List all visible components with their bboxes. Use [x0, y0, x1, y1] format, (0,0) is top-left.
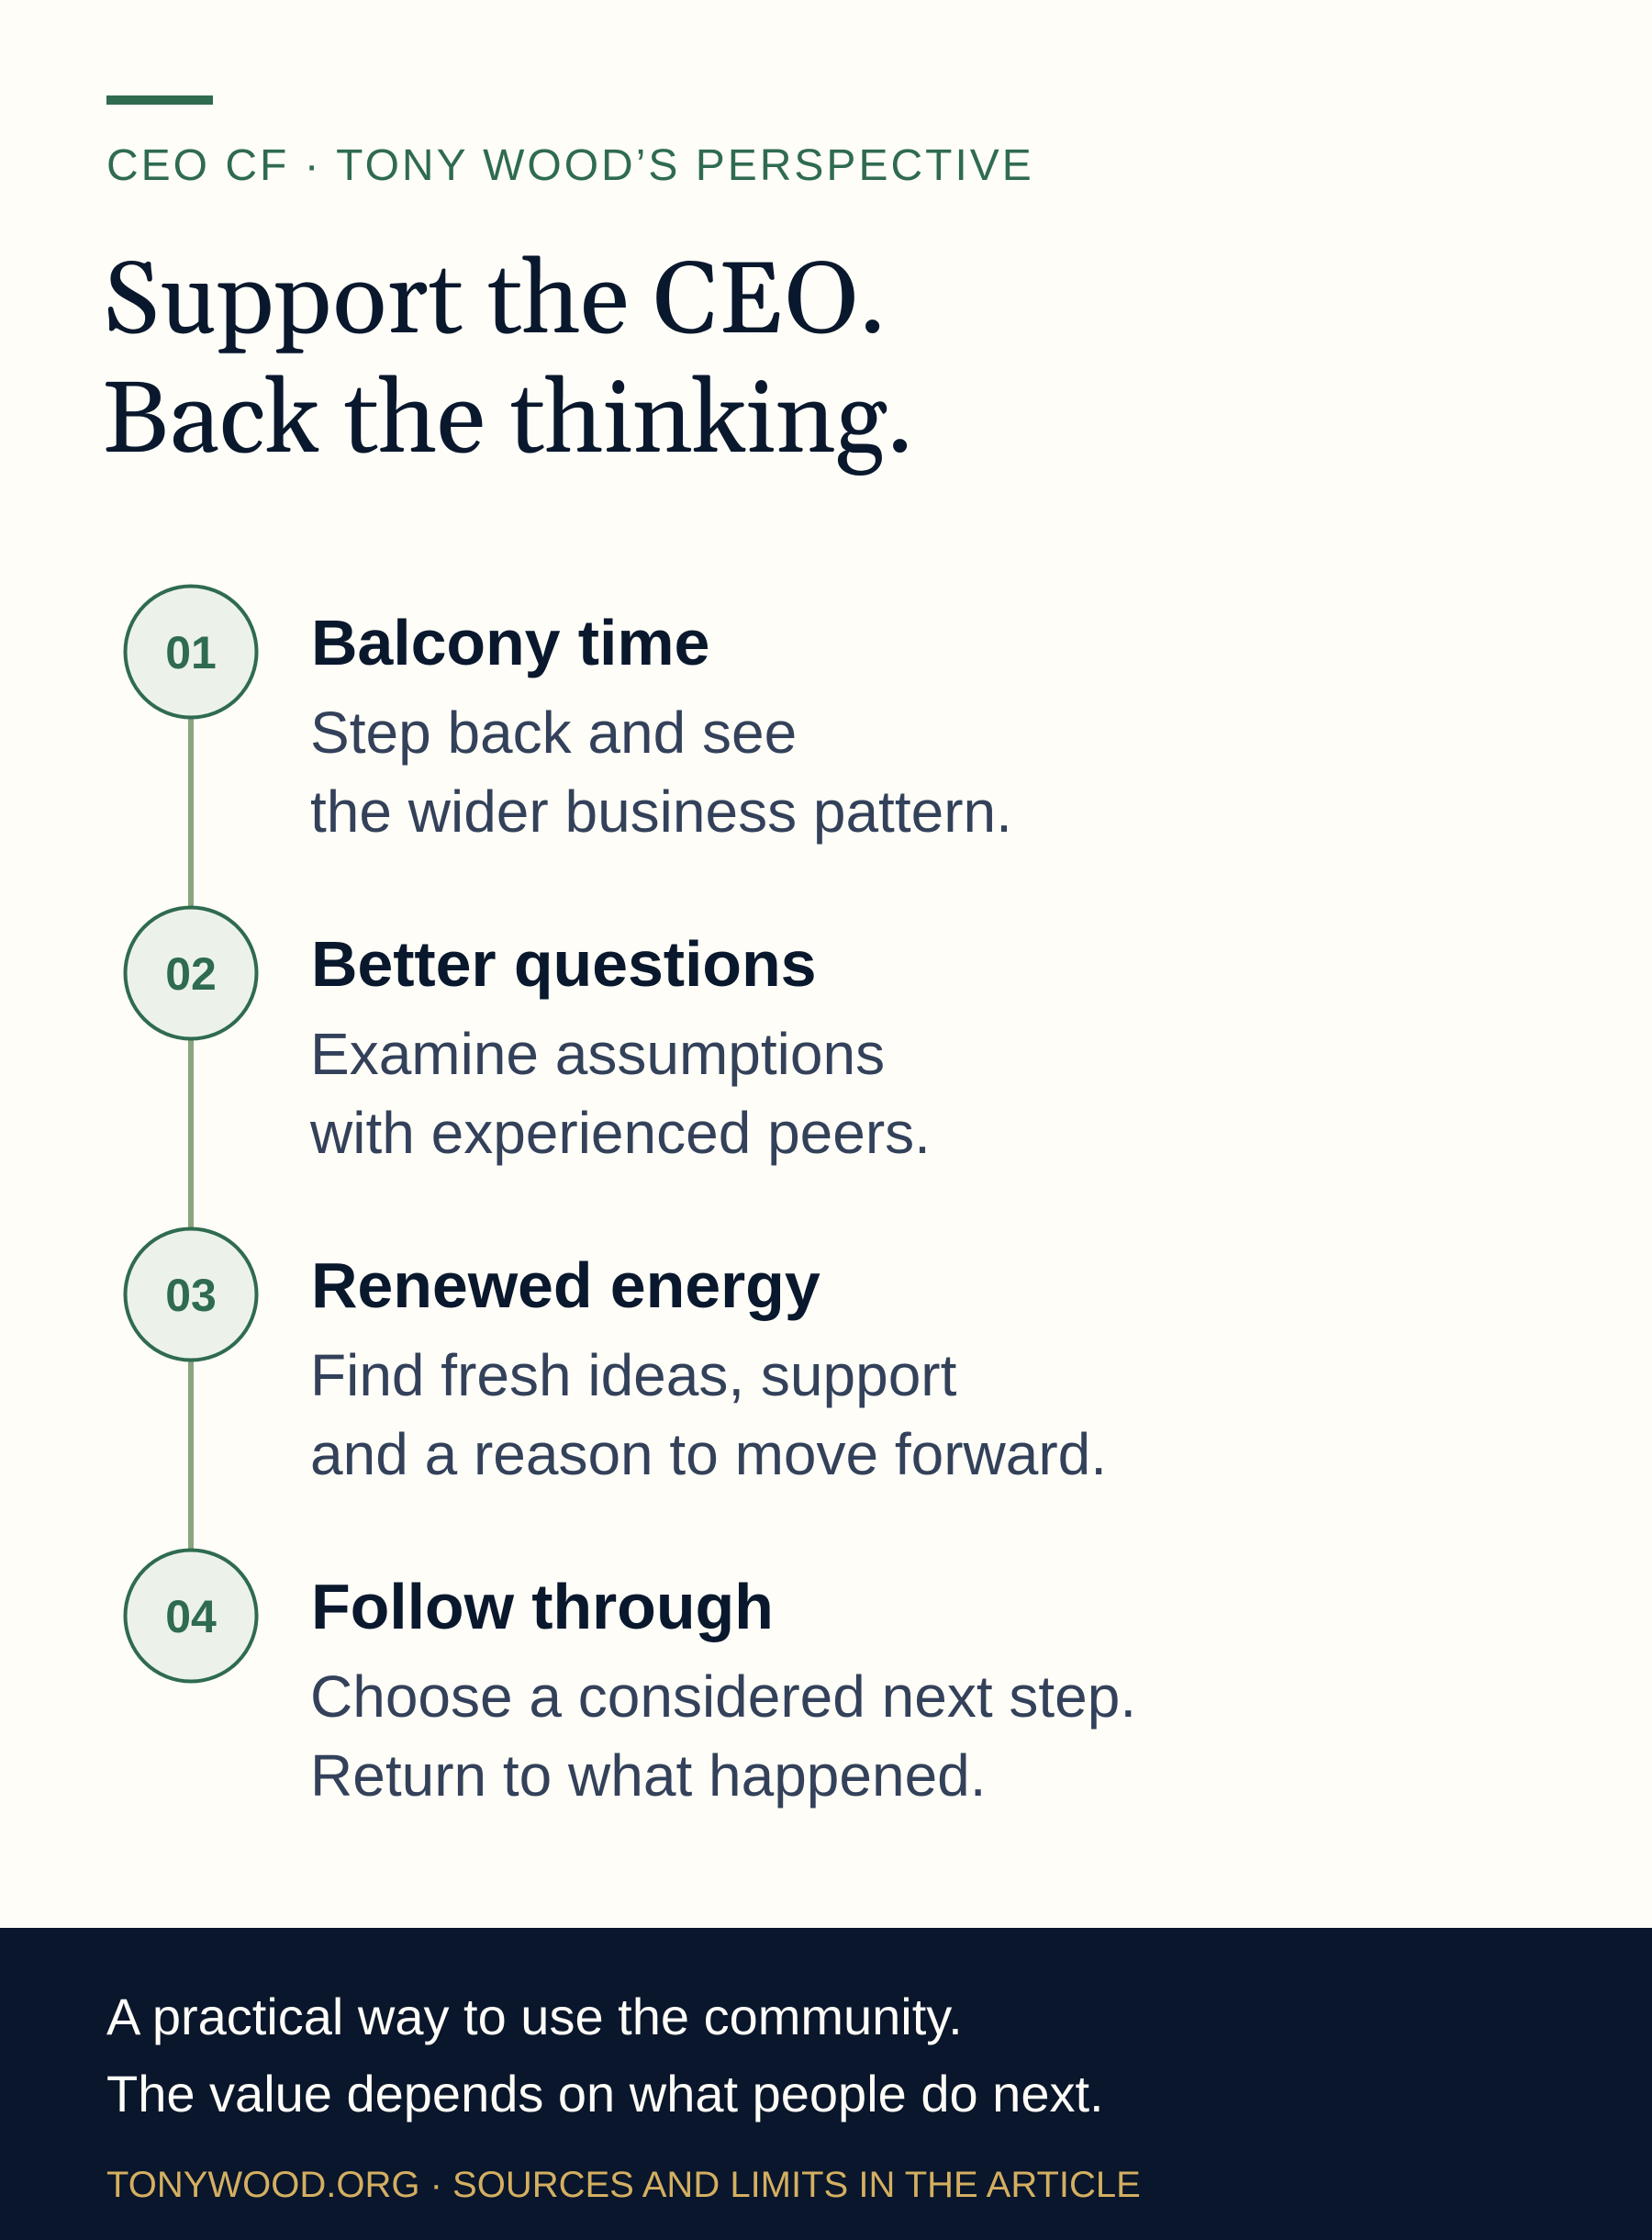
footer statement — [106, 1988, 1104, 2122]
step 3 heading: Renewed energy — [311, 1249, 820, 1321]
footer statement: The value depends on what people do next. — [106, 2065, 1104, 2122]
step 3 text: and a reason to move forward. — [310, 1421, 1107, 1487]
step 4 badge: 04 — [165, 1591, 217, 1642]
eyebrow: CEO CF · TONY WOOD’S PERSPECTIVE — [106, 141, 1034, 190]
step 1 badge: 01 — [165, 627, 217, 678]
step 1 text: the wider business pattern. — [310, 778, 1012, 845]
step 3 badge: 03 — [165, 1270, 217, 1321]
step 4: Follow through — [125, 1550, 1136, 1809]
footer band — [0, 1928, 1652, 2240]
step 2: Better questions — [125, 907, 931, 1166]
title: Support the CEO. — [103, 239, 886, 367]
step 2 badge — [125, 907, 257, 1039]
step 2 badge: 02 — [165, 948, 217, 1000]
step 4 badge — [125, 1550, 257, 1682]
step 4 heading: Follow through — [311, 1571, 774, 1642]
step 4 text — [310, 1663, 1136, 1809]
connector line 2 — [188, 1037, 194, 1230]
step 2 text: with experienced peers. — [309, 1100, 931, 1166]
footer source line: TONYWOOD.ORG · SOURCES AND LIMITS IN THE ARTICLE — [106, 2165, 1141, 2205]
step 3 text: Find fresh ideas, support — [310, 1342, 957, 1408]
step 2 text — [309, 1021, 931, 1166]
step 1 badge — [125, 586, 257, 718]
step 1: Balcony time — [125, 586, 1012, 845]
step 1 text: Step back and see — [310, 700, 797, 766]
title — [103, 239, 913, 487]
step 4 text: Return to what happened. — [310, 1742, 987, 1809]
step 3 badge — [125, 1228, 257, 1361]
step 1 text — [310, 700, 1012, 845]
footer statement: A practical way to use the community. — [106, 1988, 963, 2045]
connector line 3 — [188, 1359, 194, 1551]
accent bar — [106, 95, 213, 105]
step 2 text: Examine assumptions — [310, 1021, 885, 1087]
connector line 1 — [188, 716, 194, 909]
title: Back the thinking. — [103, 358, 913, 487]
step 4 text: Choose a considered next step. — [310, 1663, 1136, 1730]
step 1 heading: Balcony time — [311, 607, 709, 678]
step 2 heading: Better questions — [311, 928, 816, 1000]
step 3 text — [310, 1342, 1107, 1487]
step 3: Renewed energy — [125, 1228, 1107, 1487]
